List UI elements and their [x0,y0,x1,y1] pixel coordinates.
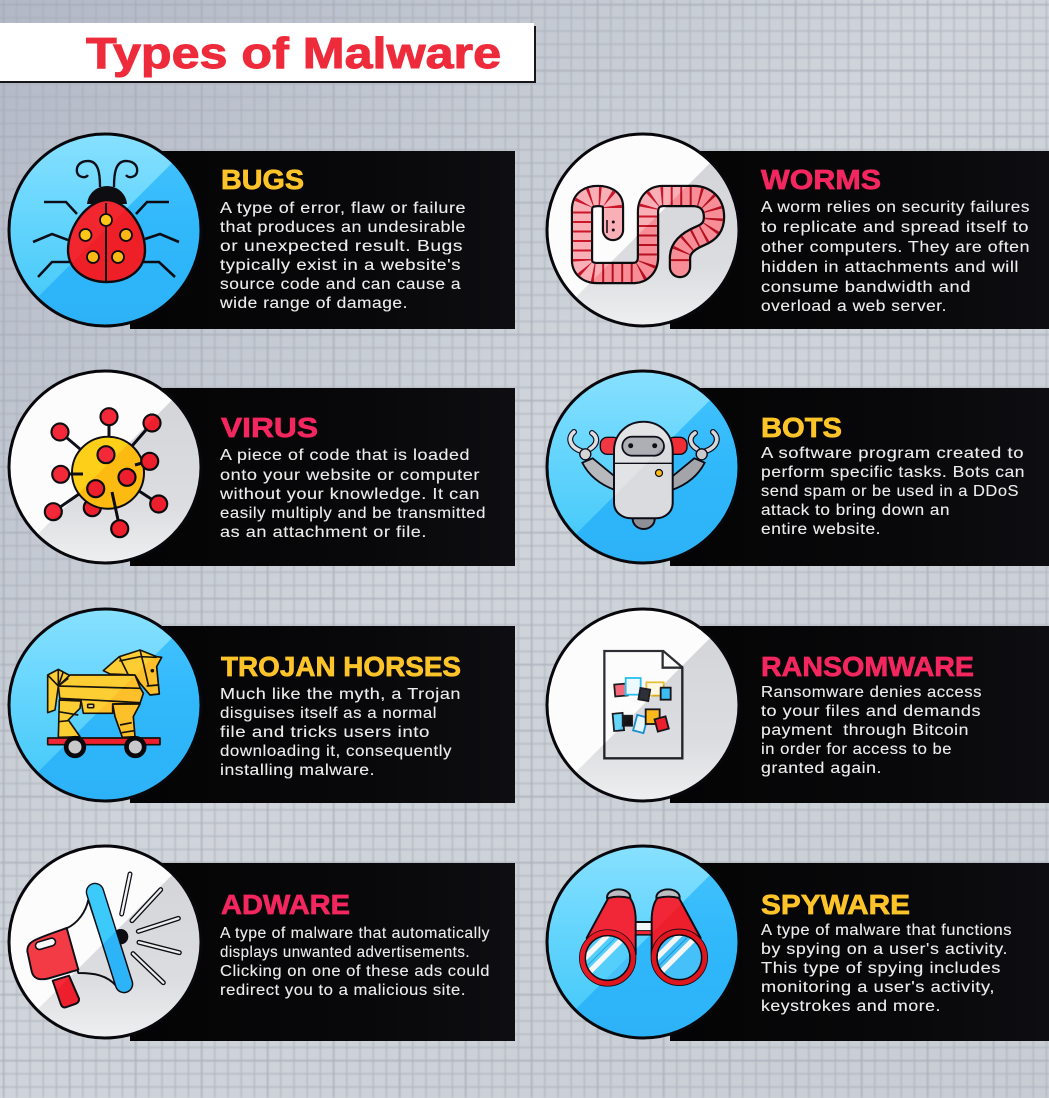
description: consume bandwidth and [761,279,971,296]
description: granted again. [761,760,882,777]
description: as an attachment or file. [220,524,427,541]
description: A piece of code that is loaded [220,447,470,464]
panel background [130,626,515,803]
icon: virus [9,371,201,563]
description: displays unwanted advertisements. [220,944,470,961]
panel background [670,151,1049,329]
panel: worms [547,134,1049,329]
panel background [130,388,515,566]
panel: bots [547,371,1049,566]
description: in order for access to be [761,741,952,758]
description [220,686,461,779]
title banner [0,23,536,83]
description [761,684,982,777]
panel: trojan horses [9,609,515,803]
description: payment through Bitcoin [761,722,969,739]
icon: worm [547,134,739,326]
description [220,925,490,999]
panel: adware [9,846,515,1041]
panel background [670,626,1049,803]
icon: scrambled document [547,609,739,801]
description: onto your website or computer [220,467,480,484]
panel background [670,388,1049,566]
description [761,922,1012,1015]
heading: TROJAN HORSES [221,651,461,682]
heading: VIRUS [221,412,318,443]
description: perform specific tasks. Bots can [761,464,1025,481]
description: typically exist in a website's [220,257,461,274]
description: wide range of damage. [219,295,408,312]
description: by spying on a user's activity. [761,941,1008,958]
description: A worm relies on security failures [761,199,1030,216]
icon: trojan horse [9,609,201,801]
description: A type of malware that functions [761,922,1012,939]
panel background [670,863,1049,1041]
description: without your knowledge. It can [219,486,480,503]
heading: BOTS [761,412,842,443]
description: other computers. They are often [761,239,1030,256]
description [761,199,1030,315]
description: A type of error, flaw or failure [220,200,466,217]
panel: bugs [9,134,515,329]
description: source code and can cause a [220,276,461,293]
description: This type of spying includes [761,960,1001,977]
description: that produces an undesirable [220,219,466,236]
description: attack to bring down an [761,502,950,519]
description: Clicking on one of these ads could [220,963,490,980]
description: redirect you to a malicious site. [220,982,466,999]
icon: binoculars [547,846,739,1038]
icon: megaphone [9,846,201,1038]
heading: WORMS [761,164,881,195]
panel: ransomware [547,609,1049,803]
description: A type of malware that automatically [220,925,490,942]
panel: spyware [547,846,1049,1041]
description: installing malware. [220,762,375,779]
description: overload a web server. [761,298,947,315]
heading: ADWARE [221,889,350,920]
description: monitoring a user's activity, [761,979,995,996]
description [761,445,1025,538]
panel background [130,863,515,1041]
description [219,200,466,312]
heading: SPYWARE [761,889,910,920]
description: Much like the myth, a Trojan [220,686,461,703]
title banner: Types of Malware [86,29,501,78]
heading: RANSOMWARE [761,651,974,682]
panel: virus [9,371,515,566]
description: to your files and demands [761,703,981,720]
description [219,447,486,541]
description: file and tricks users into [220,724,430,741]
description: hidden in attachments and will [761,259,1019,276]
heading: BUGS [221,164,304,195]
description: easily multiply and be transmitted [220,505,486,522]
description: keystrokes and more. [761,998,941,1015]
description: disguises itself as a normal [220,705,437,722]
description: send spam or be used in a DDoS [761,483,1019,500]
icon: ladybug [9,134,201,326]
description: entire website. [761,521,881,538]
description: or unexpected result. Bugs [220,238,463,255]
description: Ransomware denies access [761,684,982,701]
description: downloading it, consequently [220,743,452,760]
description: A software program created to [761,445,1024,462]
panel background [130,151,515,329]
description: to replicate and spread itself to [761,219,1029,236]
icon: robot [547,371,739,563]
